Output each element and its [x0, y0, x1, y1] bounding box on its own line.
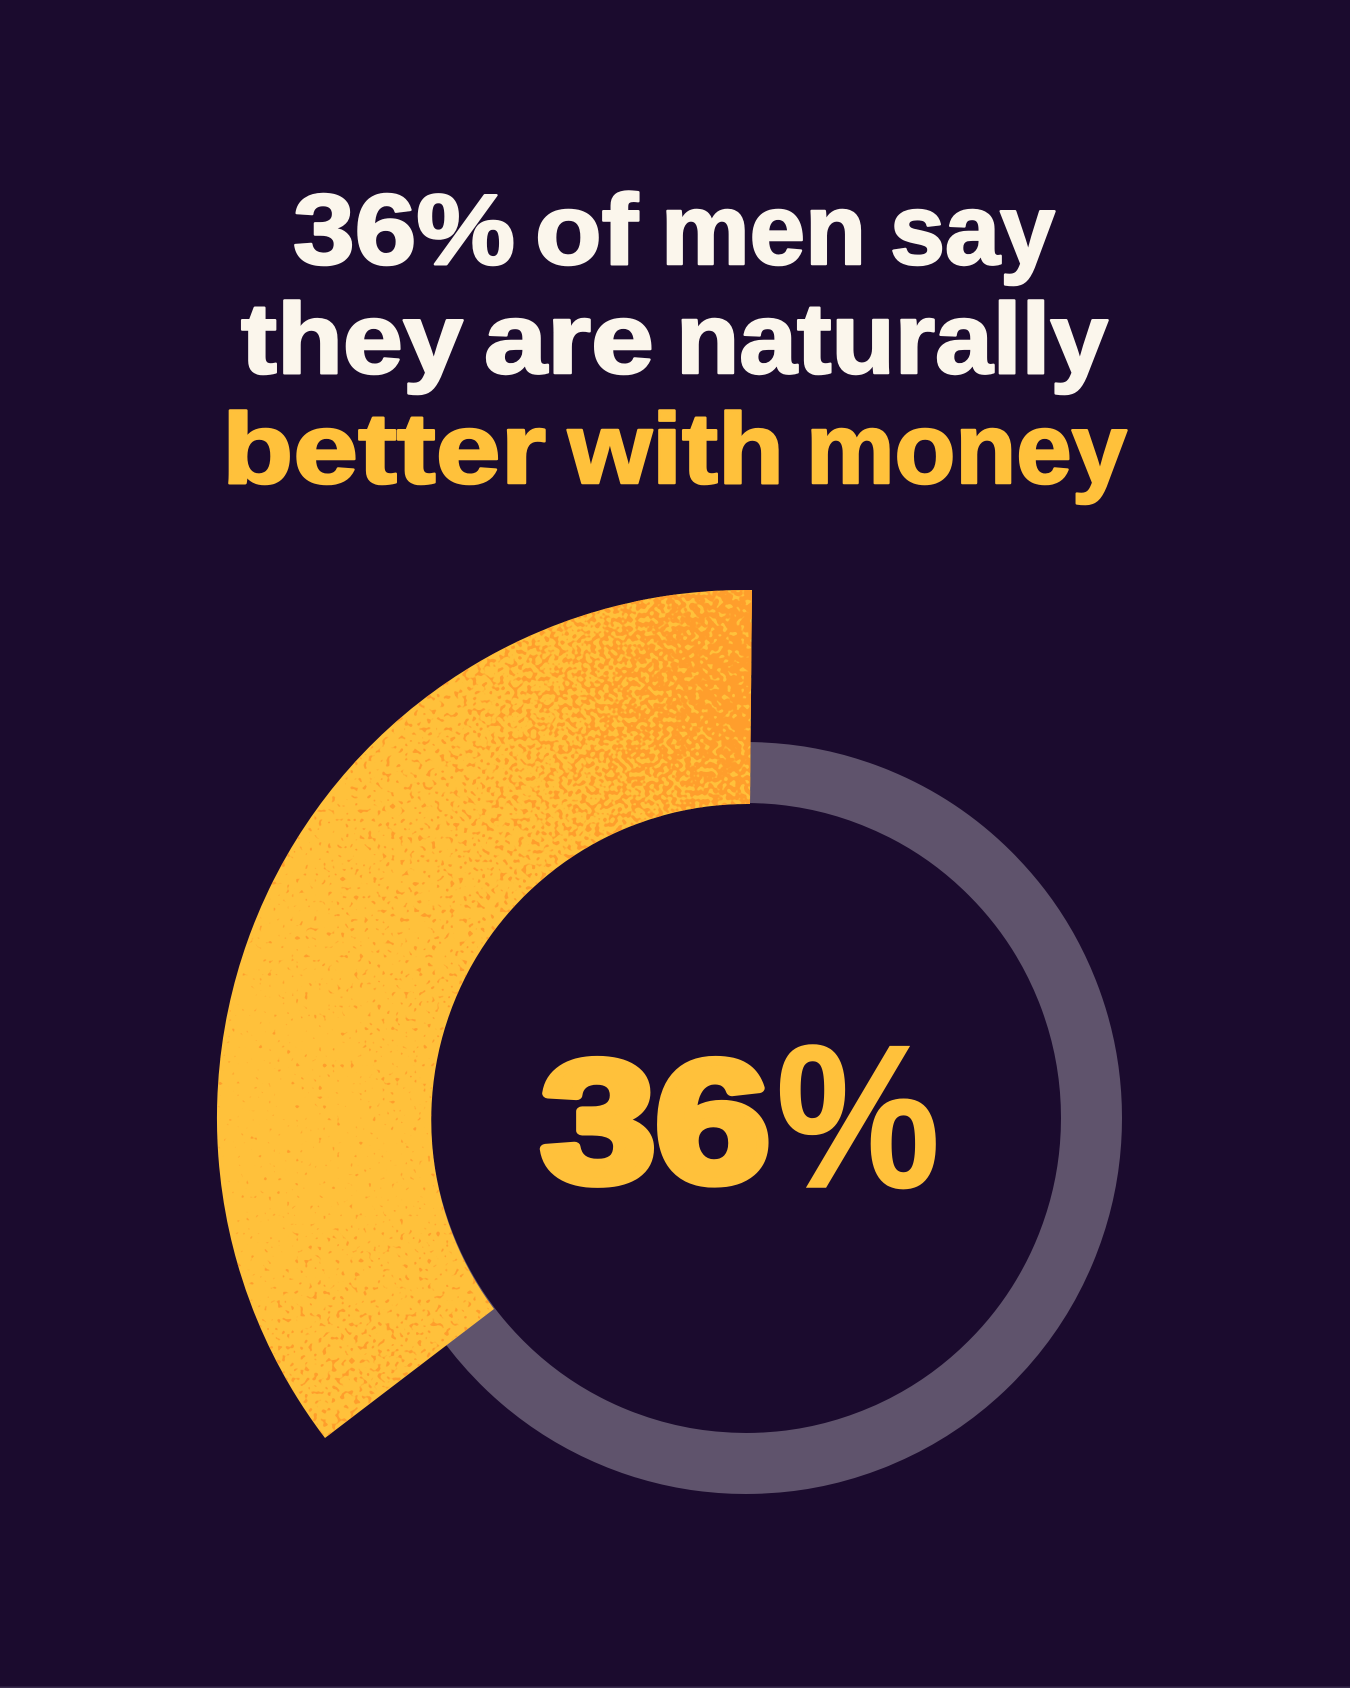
title line 2: are	[484, 283, 654, 395]
center value	[541, 1003, 940, 1231]
title line 1: 36%	[293, 174, 515, 286]
title line 3 highlight: money	[806, 393, 1127, 505]
center value: %	[776, 1003, 940, 1231]
title line 2	[241, 283, 1108, 395]
title line 1	[293, 174, 1055, 286]
title line 1: of	[535, 174, 639, 286]
chart wedge: 36 percent	[216, 590, 752, 1438]
title line 2: naturally	[676, 283, 1108, 395]
chart track: remaining share	[400, 772, 1092, 1464]
title line 3 highlight	[222, 393, 1127, 505]
title line 2: they	[241, 283, 463, 395]
donut chart	[200, 570, 1092, 1464]
title line 3 highlight: better	[222, 393, 546, 505]
title line 3 highlight: with	[567, 393, 784, 505]
center value: 36	[541, 1026, 770, 1218]
title	[222, 174, 1127, 505]
title line 1: say	[890, 174, 1055, 286]
title line 1: men	[661, 174, 866, 286]
